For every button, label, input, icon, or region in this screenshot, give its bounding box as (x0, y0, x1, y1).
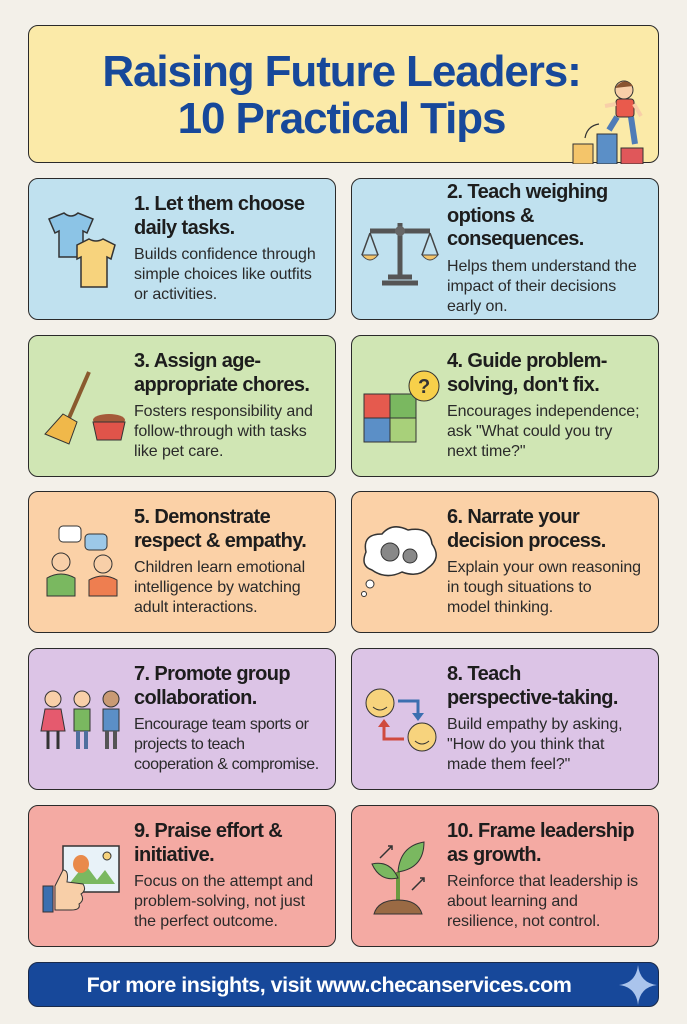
text: tip 3: like pet care. (134, 443, 223, 460)
text: tip 5: adult interactions. (134, 599, 258, 616)
text: tip 8: "How do you think that (447, 736, 604, 753)
title: Raising Future Leaders: (102, 47, 581, 96)
text: tip 7: collaboration. (134, 686, 257, 708)
panel: tip 7 (28, 648, 336, 790)
text: tip 7: Encourage team sports or (134, 716, 308, 733)
panel: tip 3 (28, 335, 336, 477)
text: tip 5: Children learn emotional (134, 559, 305, 576)
text: tip 3 (134, 350, 313, 460)
panel: tip 1 (28, 178, 336, 320)
icon: thought cloud with gears (361, 526, 437, 597)
title (102, 47, 581, 143)
panel: tip 6 (351, 491, 659, 633)
text: tip 6: in tough situations to (447, 579, 592, 596)
icon: thumbs up with drawing (42, 845, 120, 912)
icon: sparkle (619, 965, 657, 1005)
icon: child climbing blocks (572, 80, 644, 164)
text: tip 8: 8. Teach (447, 663, 521, 685)
text: tip 9: problem-solving, not just (134, 893, 305, 910)
text: tip 2: options & (447, 205, 534, 227)
text: tip 1: simple choices like outfits (134, 266, 312, 283)
icon: two people talking (46, 526, 118, 596)
text: tip 9 (134, 820, 313, 930)
panel: tip 4 (351, 335, 659, 477)
icon: three children (40, 690, 120, 749)
text: tip 4: next time?" (447, 443, 525, 460)
text: tip 10: 10. Frame leadership (447, 820, 634, 842)
text: tip 4 (447, 350, 639, 460)
text: tip 2: Helps them understand the (447, 258, 637, 275)
text: tip 4: solving, don't fix. (447, 374, 599, 396)
icon: puzzle and question (364, 370, 440, 442)
text: tip 3: appropriate chores. (134, 374, 309, 396)
text: tip 6 (447, 506, 641, 616)
text: tip 5 (134, 506, 306, 616)
footer text: For more insights, visit www.checanservices.com (87, 973, 571, 997)
icon: sprout (371, 841, 425, 914)
text: tip 10: about learning and (447, 893, 578, 910)
text: tip 7: projects to teach (134, 736, 245, 753)
icon: shirts (48, 212, 116, 288)
panel: tip 8 (351, 648, 659, 790)
text: tip 3: follow-through with tasks (134, 423, 307, 440)
text: tip 6: model thinking. (447, 599, 553, 616)
title panel (28, 25, 659, 163)
text: tip 8: made them feel?" (447, 756, 570, 773)
text: tip 3: 3. Assign age- (134, 350, 260, 372)
text: tip 8 (447, 663, 622, 773)
panel: tip 2 (351, 178, 659, 320)
text: tip 8: Build empathy by asking, (447, 716, 622, 733)
text: tip 4: 4. Guide problem- (447, 350, 607, 372)
panel: tip 9 (28, 805, 336, 947)
icon: smiley faces with arrows (366, 688, 436, 752)
text: tip 2: early on. (447, 298, 507, 315)
text: tip 1 (134, 193, 316, 303)
panel: tip 5 (28, 491, 336, 633)
text: tip 5: respect & empathy. (134, 530, 306, 552)
text: tip 7: 7. Promote group (134, 663, 290, 685)
text: tip 1: 1. Let them choose (134, 193, 304, 215)
text: tip 2: impact of their decisions (447, 278, 616, 295)
text: tip 10: as growth. (447, 844, 541, 866)
text: tip 10: resilience, not control. (447, 913, 600, 930)
text: tip 3: Fosters responsibility and (134, 403, 313, 420)
text: tip 4: ask "What could you try (447, 423, 612, 440)
text: tip 10 (447, 820, 638, 930)
text: tip 9: Focus on the attempt and (134, 873, 313, 890)
text: tip 1: daily tasks. (134, 216, 235, 238)
text: tip 2: consequences. (447, 228, 584, 250)
text: tip 1: or activities. (134, 286, 217, 303)
text: tip 9: 9. Praise effort & (134, 820, 282, 842)
text: tip 8: perspective-taking. (447, 686, 618, 708)
text: tip 10: Reinforce that leadership is (447, 873, 638, 890)
text: tip 2: 2. Teach weighing (447, 181, 608, 203)
text: tip 1: Builds confidence through (134, 246, 316, 263)
text: tip 6: Explain your own reasoning (447, 559, 641, 576)
icon: scales (361, 223, 439, 286)
text: tip 2 (447, 181, 637, 315)
text: tip 5: 5. Demonstrate (134, 506, 270, 528)
text: tip 7 (134, 663, 319, 773)
text: tip 5: intelligence by watching (134, 579, 301, 596)
icon: puzzle and question: ? (418, 376, 430, 398)
text: tip 9: initiative. (134, 844, 214, 866)
title: 10 Practical Tips (178, 94, 505, 143)
footer banner (28, 962, 659, 1007)
icon: broom and bowl (44, 371, 126, 445)
text: tip 6: decision process. (447, 530, 606, 552)
text: tip 7: cooperation & compromise. (134, 756, 319, 773)
text: tip 9: the perfect outcome. (134, 913, 278, 930)
panel: tip 10 (351, 805, 659, 947)
text: tip 4: Encourages independence; (447, 403, 639, 420)
text: tip 6: 6. Narrate your (447, 506, 579, 528)
